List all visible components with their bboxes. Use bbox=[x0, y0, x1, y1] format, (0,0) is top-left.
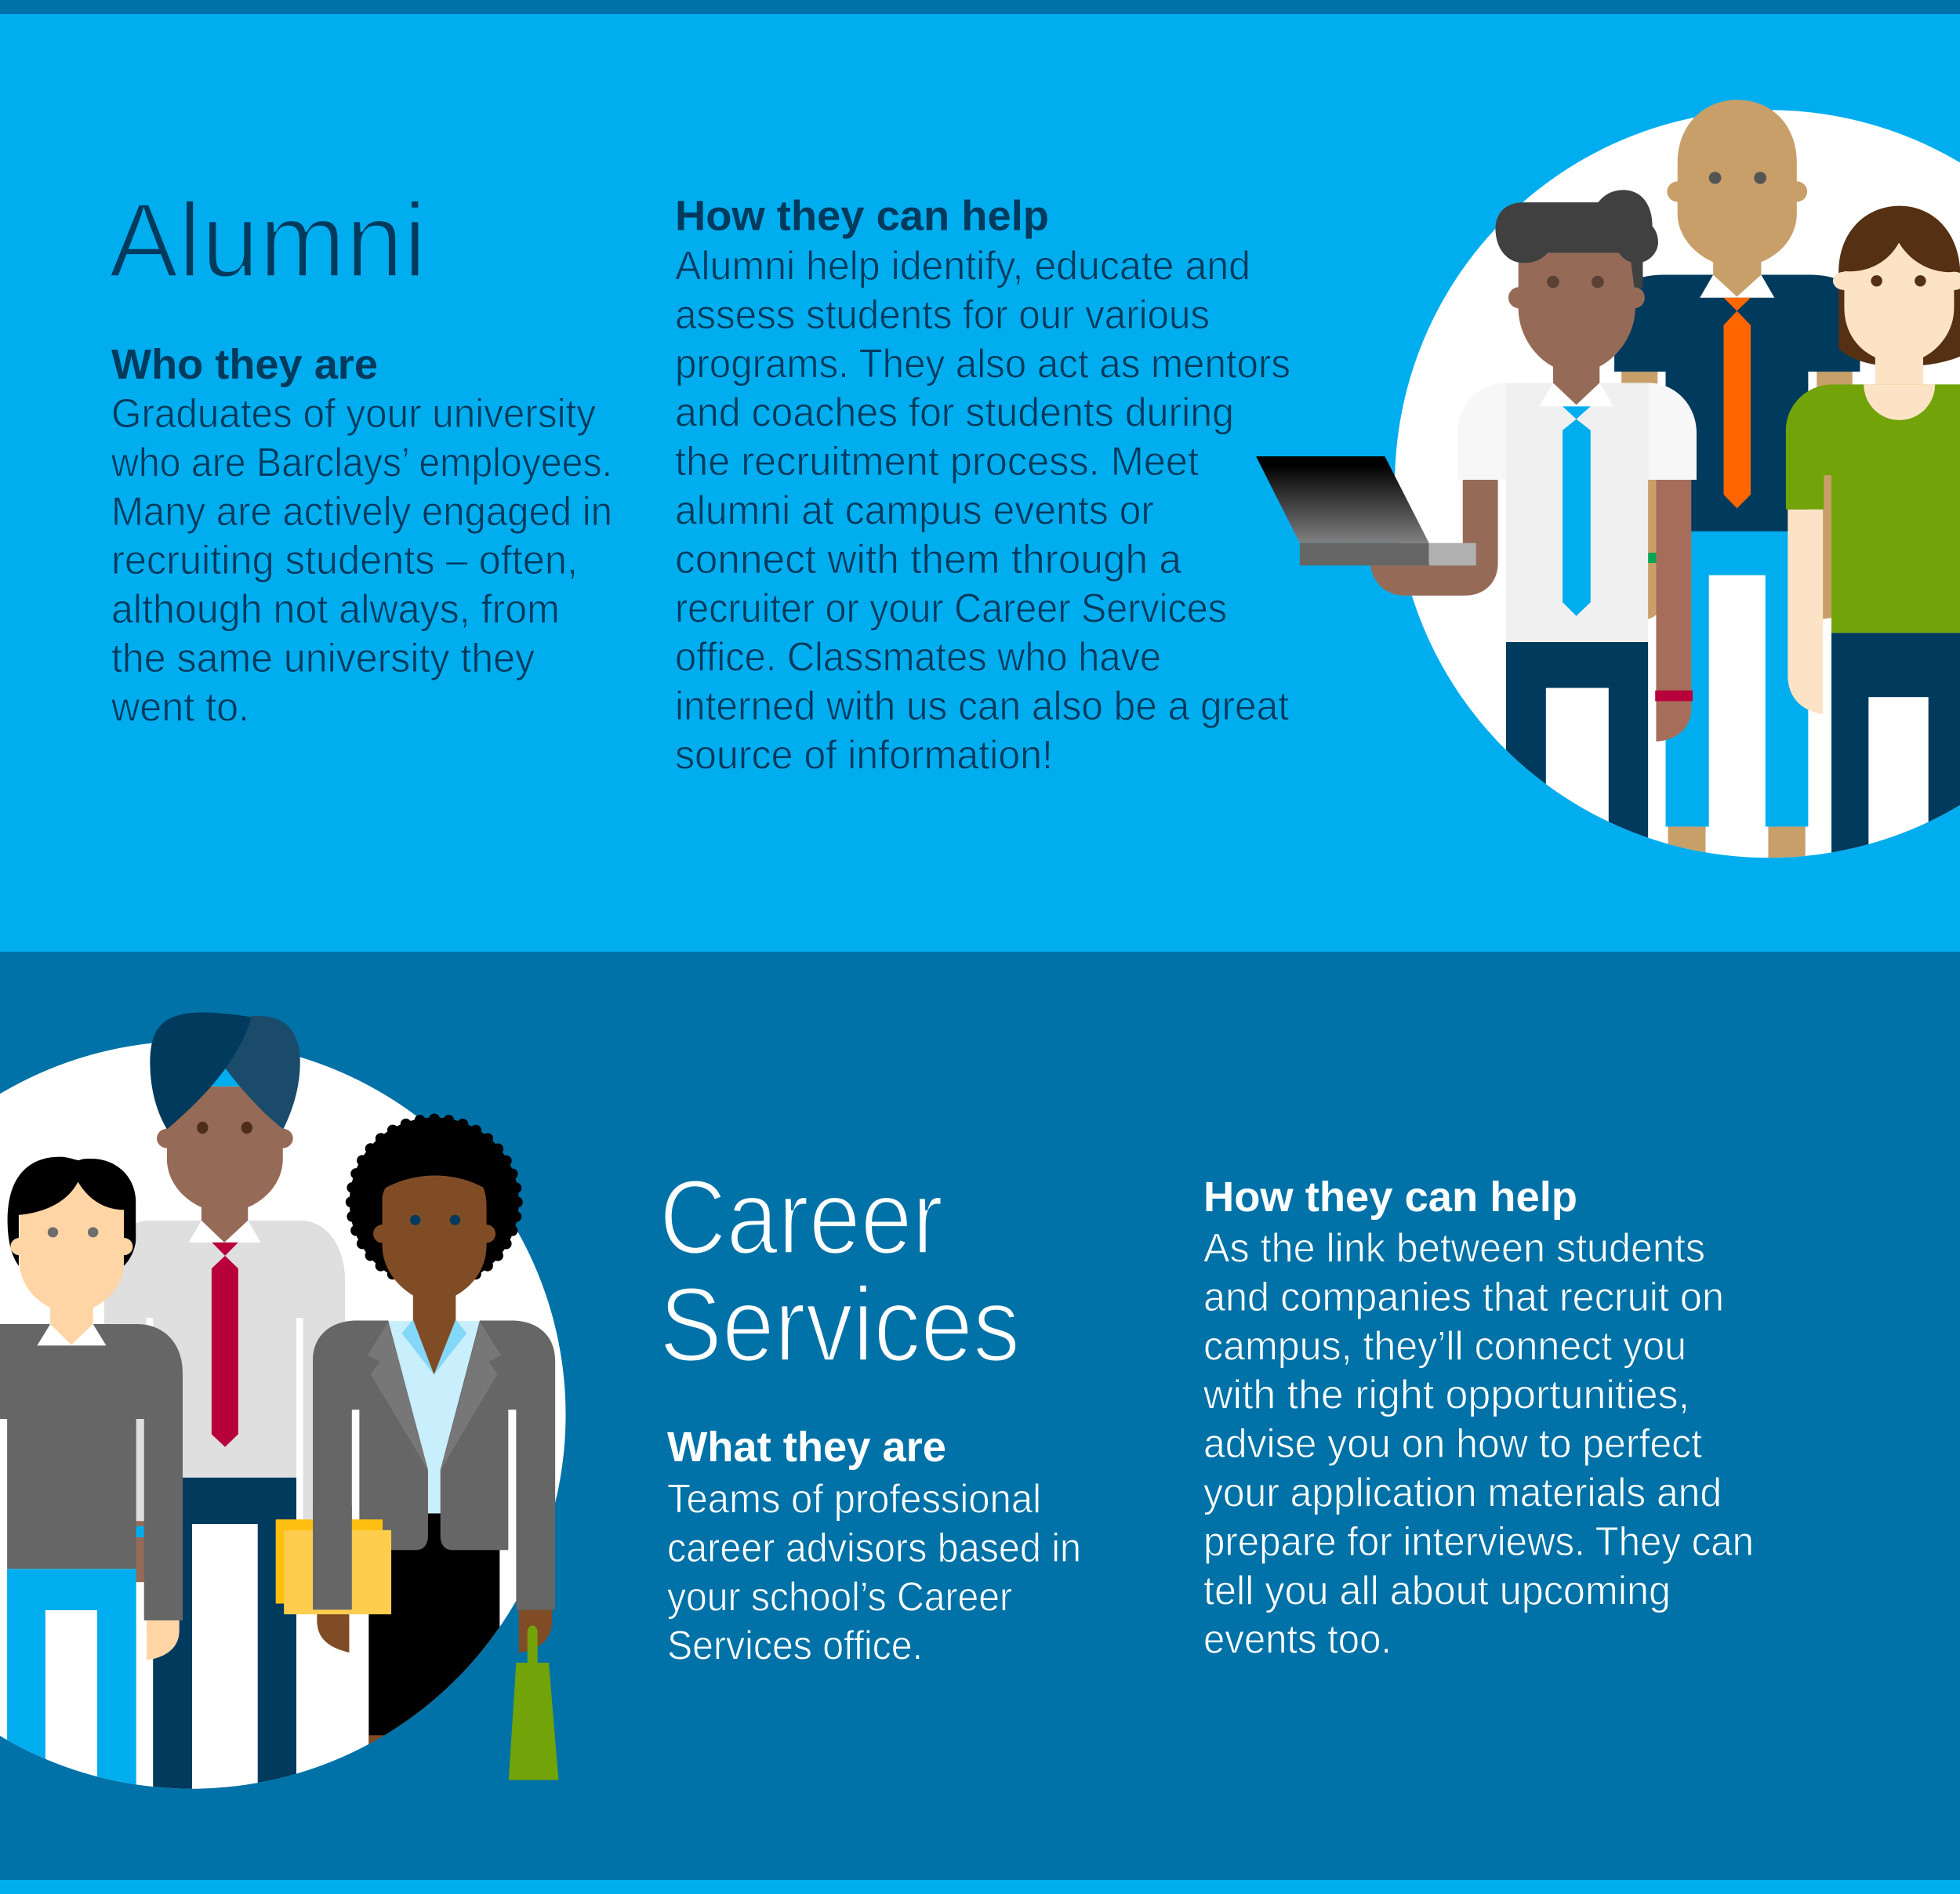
text block: who they are: Many are actively engaged in bbox=[111, 489, 612, 535]
text block: how they can help (alumni): alumni at campus events or bbox=[675, 488, 1154, 533]
panel: career services background bbox=[0, 952, 1960, 1880]
illustration: alumni group bbox=[1256, 100, 1960, 865]
text block: what they are: Services office. bbox=[667, 1624, 923, 1669]
figure: man in turban with red tie bbox=[104, 1012, 345, 1794]
text block: how they can help (career services): your application materials and bbox=[1203, 1471, 1722, 1516]
text block: who they are: Who they are bbox=[111, 341, 378, 388]
panel: career services text bbox=[659, 1158, 1754, 1669]
icon: green bag bbox=[509, 1626, 558, 1780]
text block: how they can help (career services): prepare for interviews. They can bbox=[1203, 1519, 1754, 1565]
text block: how they can help (alumni): office. Classmates who have bbox=[675, 635, 1161, 680]
text block: how they can help (alumni): and coaches for students during bbox=[675, 390, 1234, 436]
text block: how they can help (alumni): assess students for our various bbox=[675, 292, 1210, 338]
text block: who they are: although not always, from bbox=[111, 587, 560, 633]
text block: how they can help (career services): with the right opportunities, bbox=[1203, 1373, 1690, 1418]
text block: how they can help (alumni): source of information! bbox=[675, 732, 1053, 778]
text block: how they can help (alumni): How they can help bbox=[675, 193, 1049, 240]
panel: alumni text bbox=[109, 181, 1290, 778]
title: Career Services: Career bbox=[659, 1158, 943, 1276]
text block: who they are: the same university they bbox=[111, 636, 535, 681]
text block: how they can help (career services): events too. bbox=[1203, 1617, 1392, 1663]
figure: bald man with orange tie bbox=[1614, 100, 1860, 864]
text block: who they are: Graduates of your university bbox=[111, 391, 596, 437]
text block: who they are: who are Barclays’ employees. bbox=[111, 440, 612, 485]
text block: what they are: What they are bbox=[667, 1424, 946, 1471]
title: Alumni: Alumni bbox=[109, 181, 426, 299]
text block: how they can help (alumni) bbox=[675, 193, 1290, 778]
text block: how they can help (alumni): Alumni help identify, educate and bbox=[675, 243, 1250, 288]
text block: how they can help (career services): campus, they’ll connect you bbox=[1203, 1323, 1686, 1369]
text block: how they can help (career services): tell you all about upcoming bbox=[1203, 1568, 1671, 1613]
figure: woman in grey jacket bbox=[276, 1118, 558, 1799]
text block: how they can help (career services): As the link between students bbox=[1203, 1226, 1705, 1272]
text block: how they can help (career services) bbox=[1203, 1174, 1754, 1663]
text block: how they can help (alumni): recruiter or your Career Services bbox=[675, 586, 1227, 631]
text block: how they can help (alumni): programs. They also act as mentors bbox=[675, 341, 1290, 386]
text block: how they can help (career services): and companies that recruit on bbox=[1203, 1275, 1724, 1320]
text block: what they are: Teams of professional bbox=[667, 1477, 1041, 1522]
text block: who they are bbox=[111, 341, 612, 730]
panel: alumni background bbox=[0, 14, 1960, 952]
icon: laptop bbox=[1256, 456, 1476, 565]
bottom strip bbox=[0, 1880, 1960, 1894]
text block: who they are: went to. bbox=[111, 684, 249, 730]
title: Career Services bbox=[659, 1158, 1020, 1384]
figure: man in grey sweater bbox=[0, 1157, 183, 1794]
text block: what they are: career advisors based in bbox=[667, 1526, 1081, 1571]
top strip bbox=[0, 0, 1960, 14]
white circle bbox=[1395, 110, 1960, 858]
title: Career Services: Services bbox=[659, 1265, 1020, 1384]
figure: woman in green top bbox=[1786, 206, 1960, 865]
text block: how they can help (alumni): interned with us can also be a great bbox=[675, 684, 1290, 729]
illustration: career services group bbox=[0, 1012, 566, 1799]
white circle bbox=[0, 1041, 566, 1789]
figure: man with laptop and blue tie bbox=[1256, 190, 1697, 862]
text block: what they are bbox=[667, 1424, 1081, 1669]
text block: what they are: your school’s Career bbox=[667, 1574, 1012, 1620]
text block: how they can help (career services): How they can help bbox=[1203, 1174, 1577, 1221]
text block: how they can help (alumni): the recruitment process. Meet bbox=[675, 439, 1200, 484]
text block: how they can help (career services): advise you on how to perfect bbox=[1203, 1421, 1703, 1467]
text block: how they can help (alumni): connect with them through a bbox=[675, 537, 1181, 582]
text block: who they are: recruiting students – often, bbox=[111, 538, 578, 583]
icon: yellow folders bbox=[276, 1519, 391, 1614]
